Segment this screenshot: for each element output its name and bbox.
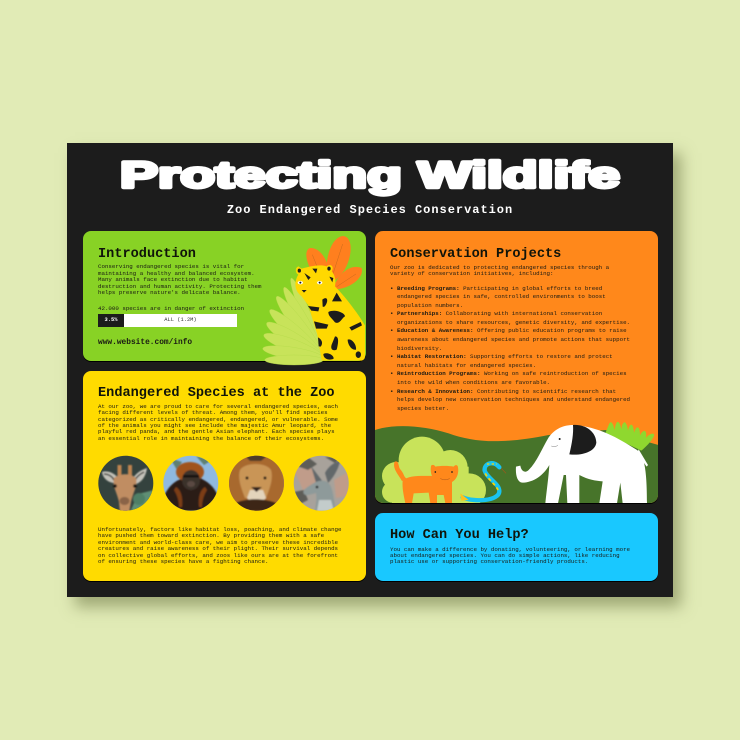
subtitle: Zoo Endangered Species Conservation bbox=[227, 203, 513, 217]
website link: www.website.com/info bbox=[98, 338, 192, 347]
intro text: Our zoo is dedicated to protecting endangered species through a variety of conservation initiatives, including: bbox=[390, 264, 609, 277]
cat bbox=[394, 461, 458, 503]
panel: endangered species bbox=[83, 371, 366, 581]
illustration: elephant, cat and snake scene bbox=[375, 422, 658, 503]
body text: Conserving endangered species is vital for maintaining a healthy and balanced ecosystem. Many animals face extinction due to habitat destruction and human activity. Protecting them helps preserve nature's delicate balance. bbox=[98, 263, 262, 296]
panel: how can you help bbox=[375, 513, 658, 581]
bar segment: all: ALL (1.2M) bbox=[164, 317, 197, 323]
photo: kangaroo bbox=[293, 455, 349, 511]
panel: introduction bbox=[83, 231, 366, 361]
animal photo row bbox=[98, 456, 349, 511]
heading: Introduction bbox=[98, 246, 196, 262]
heading: How Can You Help? bbox=[390, 528, 529, 543]
elephant bbox=[516, 425, 647, 503]
photo: monkey bbox=[163, 455, 219, 511]
body text bottom: Unfortunately, factors like habitat loss, poaching, and climate change have pushed them toward extinction. By providing them with a safe environment and world-class care, we aim to preserve these incredible creatures and raise awareness of their plight. Their survival depends on collective global efforts, and zoos like ours are at the forefront of ensuring these species have a fighting chance. bbox=[98, 526, 342, 565]
stat bar bbox=[98, 314, 237, 327]
poster card bbox=[67, 143, 673, 597]
panel: conservation projects bbox=[375, 231, 658, 503]
heading: Endangered Species at the Zoo bbox=[98, 386, 335, 401]
heading: Conservation Projects bbox=[390, 246, 561, 262]
bar segment: 3.5% bbox=[98, 314, 124, 327]
photo: lion bbox=[229, 456, 284, 511]
snake bbox=[463, 463, 499, 500]
title: Protecting Wildlife bbox=[120, 154, 620, 196]
illustration: leopard with leaves bbox=[262, 236, 365, 366]
body text top: At our zoo, we are proud to care for several endangered species, each facing different levels of threat. Among them, you'll find species categorized as critically endangered, endangered, or vulnerable. Some of the animals you might see include the majestic Amur leopard, the playful red panda, and the gentle Asian elephant. Each species plays an essential role in maintaining the balance of their ecosystems. bbox=[98, 403, 338, 442]
stat label: 42.000 species are in danger of extinction bbox=[98, 304, 244, 312]
photo: giraffe bbox=[98, 455, 154, 513]
project list: • Breeding Programs: Participating in global efforts to breed endangered species in safe, controlled environments to boost population numbers. • Partnerships: Collaborating with international conservation organizations to share resources, genetic diversity, and expertise. • Education & Awareness: Offering public education programs to raise awareness about endangered species and promote actions that support biodiversity. • Habitat Restoration: Supporting efforts to restore and protect natural habitats for endangered species. • Reintroduction Programs: Working on safe reintroduction of species into the wild when conditions are favorable. • Research & Innovation: Contributing to scientific research that helps develop new conservation techniques and understand endangered species better. bbox=[390, 284, 630, 412]
bar segment: 3.5%: 3.5% bbox=[105, 317, 117, 323]
grass bbox=[605, 422, 654, 451]
body text: You can make a difference by donating, volunteering, or learning more about endangered species. You can do simple actions, like reducing plastic use or supporting conservation-friendly products. bbox=[390, 546, 630, 565]
